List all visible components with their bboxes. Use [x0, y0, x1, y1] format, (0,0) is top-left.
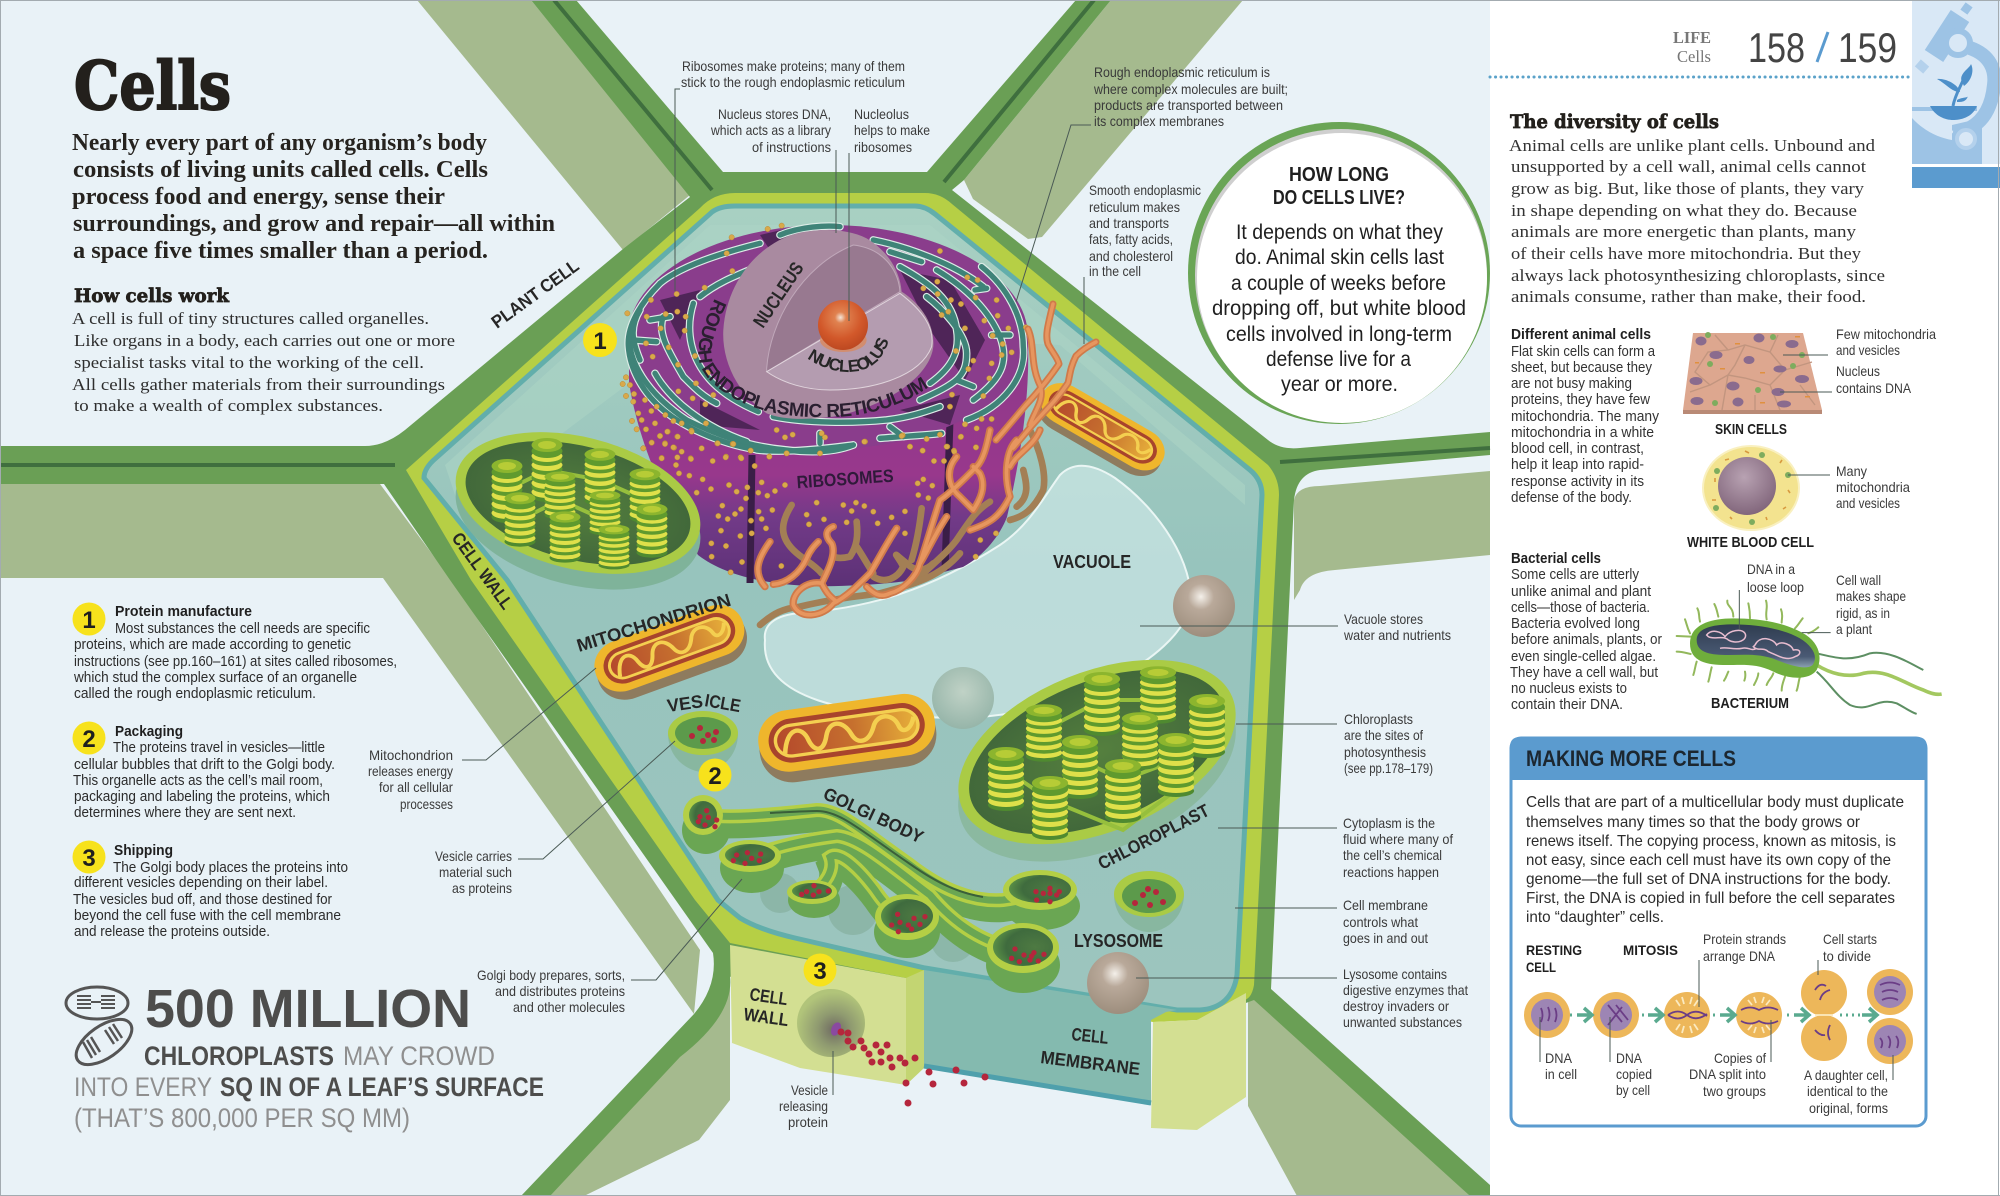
rough endoplasmic reticulum and nucleus [620, 222, 1028, 586]
organelle labels: WALL [742, 1004, 790, 1030]
callout: vesicle releasing protein [779, 1051, 833, 1130]
text: bacterial cells: unlike animal and plant [1511, 583, 1652, 600]
text: different animal cells: Different animal cells [1511, 326, 1651, 343]
mitosis labels: to divide [1823, 948, 1871, 964]
sphere at vacuole edge [1173, 575, 1235, 637]
title: Cells [74, 47, 231, 125]
making more cells text: themselves many times so that the body grows or [1526, 814, 1861, 831]
heading: how cells work: How cells work [74, 285, 230, 307]
labels: skin cells [1715, 326, 1936, 438]
callout: chloroplasts: photosynthesis [1344, 744, 1426, 760]
labels: bacterium: a plant [1836, 621, 1872, 637]
callout: smooth endoplasmic reticulum: reticulum makes [1089, 199, 1180, 215]
callout: nucleolus: helps to make [854, 122, 930, 138]
section: the diversity of cells: The diversity of cells [1510, 111, 1719, 133]
statistic: 500 million chloroplasts [74, 979, 544, 1133]
panel: how long do cells live [1188, 122, 1490, 424]
text: different animal cells: sheet, but because they [1511, 359, 1652, 376]
number marker 1 on cell [583, 323, 617, 357]
text: different animal cells: Flat skin cells can form a [1511, 343, 1656, 360]
callout: nucleus [710, 106, 836, 233]
step 1: protein manufacture: 1 [82, 607, 96, 634]
making more cells text: renews itself. The copying process, known as mitosis, is [1526, 833, 1896, 850]
text: different animal cells: help it leap into rapid- [1511, 456, 1644, 473]
callout: cytoplasm: reactions happen [1343, 864, 1439, 880]
organelle labels: PLANT CELL [488, 256, 583, 332]
lysosome [1087, 952, 1149, 1014]
callout: cell membrane: goes in and out [1343, 930, 1428, 946]
step 3: shipping [72, 840, 348, 940]
mitosis labels [1526, 931, 1888, 1116]
text: bacterial cells: no nucleus exists to [1511, 680, 1627, 697]
text: bacterial cells [1510, 550, 1662, 713]
ribosome dots on cylinder [641, 429, 999, 575]
label: rough endoplasmic reticulum: ROUGH ENDOPLASMIC RETICULUM [698, 300, 928, 418]
mitosis labels: arrange DNA [1703, 948, 1776, 964]
callout: golgi body [477, 879, 742, 1015]
callout: vacuole: water and nutrients [1343, 627, 1451, 643]
panel: how long do cells live: do. Animal skin cells last [1235, 246, 1444, 269]
vesicle releasing protein [797, 989, 865, 1057]
text: different animal cells: are not busy making [1511, 375, 1632, 392]
organelle labels: CELL [1071, 1024, 1109, 1048]
text: bacterial cells: before animals, plants, or [1511, 631, 1662, 648]
callout: smooth endoplasmic reticulum: Smooth endoplasmic [1089, 182, 1201, 198]
smooth endoplasmic reticulum [758, 304, 1096, 625]
panel: how long do cells live: It depends on what they [1236, 221, 1443, 244]
text: different animal cells: proteins, they have few [1511, 391, 1650, 408]
step 2: packaging [72, 722, 335, 821]
making more cells text: into “daughter” cells. [1526, 909, 1664, 926]
organelle labels [448, 256, 1213, 1079]
text: bacterial cells: cells—those of bacteria. [1511, 599, 1650, 616]
callout: ribosomes: stick to the rough endoplasmic reticulum [681, 74, 905, 90]
number marker 1 on cell: 1 [593, 328, 607, 355]
label: ribosomes: RIBOSOMES [796, 466, 894, 492]
right page background [1490, 0, 2000, 1196]
chloroplast lower right [931, 623, 1263, 899]
vesicle lower right [1114, 871, 1184, 932]
callout: ribosomes [675, 58, 905, 291]
step 1: protein manufacture: proteins, which are made according to genetic [74, 637, 351, 653]
labels: skin cells: SKIN CELLS [1715, 421, 1787, 438]
intro paragraph: a space five times smaller than a period. [73, 238, 488, 264]
callout: cytoplasm: the cell’s chemical [1343, 847, 1442, 863]
labels: bacterium: rigid, as in [1836, 605, 1890, 621]
statistic: 500 million chloroplasts: SQ IN OF A LEAF’S SURFACE [220, 1072, 544, 1102]
statistic: 500 million chloroplasts: MAY CROWD [343, 1041, 495, 1071]
callout: nucleolus [849, 106, 930, 321]
vacuole [765, 466, 1190, 718]
callout: nucleus: which acts as a library [710, 122, 831, 138]
callout: lysosome: unwanted substances [1343, 1014, 1462, 1030]
number marker 2 on cell [698, 758, 732, 792]
icon: microscope with plant [1912, 0, 2000, 188]
how cells work text [72, 309, 455, 415]
text: bacterial cells: Bacterial cells [1511, 550, 1601, 567]
section: the diversity of cells [1509, 111, 1885, 306]
callout: golgi body: Golgi body prepares, sorts, [477, 967, 625, 983]
mitosis labels: in cell [1545, 1066, 1577, 1082]
labels: bacterium: makes shape [1836, 588, 1906, 604]
callout: smooth endoplasmic reticulum: fats, fatty acids, [1089, 231, 1173, 247]
callout: golgi body: and distributes proteins [495, 983, 625, 999]
callout: vesicle releasing protein: releasing [779, 1098, 828, 1114]
how cells work text: Like organs in a body, each carries out one or more [74, 331, 455, 350]
mitosis labels: two groups [1703, 1083, 1766, 1099]
step 1: protein manufacture: which stud the complex surface of an organelle [73, 670, 357, 686]
organelle labels: LYSOSOME [1074, 931, 1163, 951]
panel: how long do cells live: HOW LONG [1289, 164, 1389, 186]
sphere behind vacuole [932, 667, 994, 729]
text: bacterial cells: They have a cell wall, but [1510, 664, 1659, 681]
callout: vesicle: Vesicle carries [435, 848, 512, 864]
callout: smooth endoplasmic reticulum: in the cell [1089, 263, 1141, 279]
step 2: packaging: This organelle acts as the cell’s mail room, [73, 773, 323, 789]
labels: white blood cell [1687, 463, 1910, 551]
statistic: 500 million chloroplasts: (THAT’S 800,000 PER SQ MM) [74, 1103, 410, 1133]
mitosis labels: A daughter cell, [1804, 1067, 1888, 1083]
nucleus [723, 230, 933, 419]
mitosis labels: DNA [1545, 1050, 1573, 1066]
intro paragraph [72, 130, 555, 264]
callout: rough endoplasmic reticulum: its complex membranes [1094, 113, 1224, 129]
how cells work text: A cell is full of tiny structures called organelles. [72, 309, 429, 328]
text: bacterial cells: contain their DNA. [1511, 696, 1623, 713]
statistic: 500 million chloroplasts: CHLOROPLASTS [144, 1041, 334, 1071]
callout: cell membrane: Cell membrane [1343, 897, 1428, 913]
number marker 3 on cell: 3 [813, 958, 827, 985]
label: nucleus: NUCLEUS [750, 259, 809, 332]
step 2: packaging: The proteins travel in vesicles—little [113, 740, 325, 756]
callout: cell membrane [1235, 897, 1428, 946]
callout: rough endoplasmic reticulum [1016, 64, 1288, 302]
organelle labels: CELL [748, 984, 789, 1009]
step 3: shipping: The Golgi body places the proteins into [113, 860, 348, 876]
intro paragraph: Nearly every part of any organism’s body [72, 130, 487, 156]
panel: how long do cells live: year or more. [1281, 373, 1398, 396]
callout: golgi body: and other molecules [513, 999, 625, 1015]
step 3: shipping: The vesicles bud off, and those destined for [73, 892, 332, 908]
callout: chloroplasts [1236, 711, 1433, 776]
mitosis labels: Copies of [1714, 1050, 1766, 1066]
cell wall cutaway [730, 945, 1246, 1130]
step 2: packaging: packaging and labeling the proteins, which [74, 789, 330, 805]
mitosis labels: RESTING [1526, 942, 1582, 958]
organelle labels: MEMBRANE [1040, 1047, 1141, 1079]
mitosis labels: copied [1616, 1066, 1652, 1082]
neighbouring plant cells: wall network [0, 0, 1490, 1196]
callout: rough endoplasmic reticulum: Rough endoplasmic reticulum is [1094, 64, 1270, 80]
labels: bacterium [1711, 561, 1906, 712]
mitosis diagram [1524, 960, 1913, 1080]
label: nucleolus: NUCLEOLUS [808, 338, 888, 372]
how cells work text: specialist tasks vital to the working of the cell. [74, 353, 424, 372]
text: bacterial cells: Some cells are utterly [1511, 566, 1639, 583]
callout: mitochondrion: for all cellular [379, 779, 453, 795]
labels: skin cells: contains DNA [1836, 380, 1912, 396]
making more cells text: not easy, since each cell must have its own copy of the [1526, 852, 1891, 869]
step 1: protein manufacture: called the rough endoplasmic reticulum. [74, 686, 316, 702]
callout: smooth endoplasmic reticulum [1084, 182, 1201, 344]
dotted header rule [1490, 76, 1910, 78]
callout: mitochondrion: Mitochondrion [369, 747, 453, 763]
step 1: protein manufacture [72, 602, 397, 702]
callout: cytoplasm: Cytoplasm is the [1343, 815, 1435, 831]
section: the diversity of cells: grow as big. But, like those of plants, they vary [1511, 179, 1865, 198]
step 2: packaging: determines where they are sent next. [74, 805, 296, 821]
labels: bacterium: loose loop [1747, 579, 1804, 595]
intro paragraph: surroundings, and grow and repair—all within [73, 211, 555, 237]
page header: section and folio [1673, 24, 1897, 71]
illustration: white blood cell [1703, 446, 1830, 530]
panel: how long do cells live: cells involved in long-term [1226, 323, 1452, 346]
plant cell: wall, membrane and cytoplasm [406, 193, 1279, 1022]
step 1: protein manufacture: instructions (see pp.160–161) at sites called ribosomes, [74, 654, 397, 670]
organelle labels: CHLOROPLAST [1095, 800, 1213, 874]
chloroplast upper left [440, 409, 716, 613]
section: the diversity of cells: of their cells have more mitochondria. But they [1511, 244, 1862, 263]
panel: how long do cells live: DO CELLS LIVE? [1273, 187, 1405, 209]
callout: smooth endoplasmic reticulum: and transports [1089, 215, 1169, 231]
page header: section and folio: 159 [1838, 24, 1897, 71]
callout: mitochondrion: processes [400, 796, 453, 812]
callout: nucleolus: Nucleolus [854, 106, 909, 122]
intro paragraph: consists of living units called cells. Cells [73, 157, 488, 183]
text: different animal cells: response activity in its [1511, 473, 1644, 490]
callout: mitochondrion: releases energy [368, 763, 453, 779]
text: different animal cells: mitochondria in a white [1511, 424, 1654, 441]
callout: vesicle: material such [439, 864, 512, 880]
making more cells text: Cells that are part of a multicellular body must duplicate [1526, 794, 1904, 811]
organelle labels: CELL WALL [448, 529, 517, 613]
step 2: packaging: cellular bubbles that drift to the Golgi body. [74, 757, 335, 773]
mitosis labels: Protein strands [1703, 931, 1786, 947]
labels: skin cells: and vesicles [1836, 342, 1900, 358]
organelle labels: VES [666, 691, 704, 716]
step 2: packaging: 2 [82, 726, 96, 753]
callout: cytoplasm [1218, 815, 1453, 880]
page header: section and folio: LIFE [1673, 28, 1711, 47]
step 3: shipping: different vesicles depending on their label. [74, 875, 328, 891]
section: the diversity of cells: in shape depending on what they do. Because [1511, 201, 1857, 220]
page header: section and folio: Cells [1677, 47, 1711, 66]
illustration: bacterium [1677, 590, 1942, 714]
callout: chloroplasts: (see pp.178–179) [1344, 760, 1433, 776]
callout: cell membrane: controls what [1343, 914, 1418, 930]
labels: white blood cell: WHITE BLOOD CELL [1687, 534, 1814, 551]
organelle labels: ICLE [703, 690, 742, 716]
ribosome dots on ring [620, 223, 1029, 461]
labels: bacterium: BACTERIUM [1711, 695, 1789, 712]
panel: how long do cells live: defense live for a [1266, 348, 1411, 371]
mitosis labels: identical to the [1807, 1083, 1888, 1099]
labels: skin cells: Few mitochondria [1836, 326, 1936, 342]
callout: rough endoplasmic reticulum: products are transported between [1094, 97, 1283, 113]
step 3: shipping: beyond the cell fuse with the cell membrane [74, 908, 341, 924]
callout: mitochondrion [368, 668, 596, 812]
callout: lysosome [1136, 966, 1468, 1030]
mitochondrion centre [754, 690, 941, 787]
text: bacterial cells: Bacteria evolved long [1511, 615, 1640, 632]
callout: lysosome: destroy invaders or [1343, 998, 1449, 1014]
step 3: shipping: 3 [82, 845, 96, 872]
callout: cytoplasm: fluid where many of [1343, 831, 1453, 847]
labels: white blood cell: mitochondria [1836, 479, 1910, 495]
text: different animal cells: blood cell, in contrast, [1511, 440, 1644, 457]
callout: chloroplasts: are the sites of [1344, 727, 1423, 743]
number marker 3 on cell [804, 954, 836, 986]
callout: nucleus: of instructions [752, 139, 831, 155]
organelle labels: GOLGI BODY [820, 783, 927, 847]
icon: two chloroplasts [66, 987, 139, 1073]
step 3: shipping: Shipping [114, 843, 173, 859]
text: different animal cells: mitochondria. The many [1511, 408, 1659, 425]
step 1: protein manufacture: Protein manufacture [115, 604, 252, 620]
section: the diversity of cells: animals consume, rather than make, their food. [1511, 287, 1866, 306]
section: the diversity of cells: unsupported by a cell wall, animal cells cannot [1511, 157, 1866, 176]
callout: lysosome: digestive enzymes that [1343, 982, 1468, 998]
making more cells text [1526, 794, 1904, 926]
callout: rough endoplasmic reticulum: where complex molecules are built; [1093, 81, 1288, 97]
text: different animal cells [1511, 326, 1659, 506]
left page background [0, 0, 1490, 1196]
nucleolus [818, 300, 868, 350]
mitochondrion left [587, 597, 755, 708]
callout: vesicle [435, 741, 675, 896]
labels: white blood cell: Many [1836, 463, 1867, 479]
panel: how long do cells live: dropping off, but white blood [1212, 297, 1466, 320]
callout: vesicle releasing protein: Vesicle [791, 1082, 828, 1098]
labels: skin cells: Nucleus [1836, 363, 1880, 379]
intro paragraph: process food and energy, sense their [72, 184, 445, 210]
number marker 2 on cell: 2 [708, 763, 722, 790]
mitosis labels: DNA split into [1689, 1066, 1766, 1082]
golgi body [682, 795, 1080, 993]
labels: bacterium: DNA in a [1747, 561, 1795, 577]
callout: vacuole: Vacuole stores [1344, 611, 1423, 627]
mitosis labels: original, forms [1809, 1100, 1888, 1116]
panel: how long do cells live: a couple of weeks before [1231, 272, 1446, 295]
text: different animal cells: defense of the body. [1511, 489, 1632, 506]
labels: white blood cell: and vesicles [1836, 495, 1900, 511]
organelle labels: VACUOLE [1053, 552, 1131, 572]
heading: making more cells: MAKING MORE CELLS [1526, 746, 1736, 771]
how cells work text: to make a wealth of complex substances. [74, 396, 383, 415]
callout: nucleus: Nucleus stores DNA, [718, 106, 831, 122]
section: the diversity of cells: Animal cells are unlike plant cells. Unbound and [1509, 136, 1876, 155]
callout: nucleolus: ribosomes [854, 139, 912, 155]
mitosis labels: Cell starts [1823, 931, 1877, 947]
statistic: 500 million chloroplasts: INTO EVERY [74, 1072, 212, 1102]
callout: vacuole [1140, 611, 1451, 643]
mitochondrion upper right [1030, 375, 1172, 485]
step 2: packaging: Packaging [115, 724, 183, 740]
panel: making more cells [1510, 737, 1927, 1126]
callout: vesicle: as proteins [452, 880, 512, 896]
step 1: protein manufacture: Most substances the cell needs are specific [115, 621, 370, 637]
statistic: 500 million chloroplasts: 500 MILLION [145, 979, 471, 1039]
mitosis labels: by cell [1616, 1082, 1650, 1098]
mitosis labels: CELL [1526, 959, 1556, 975]
text: bacterial cells: even single-celled algae. [1511, 648, 1656, 665]
callout: vesicle releasing protein: protein [788, 1114, 828, 1130]
released protein dots [838, 1028, 988, 1106]
making more cells text: genome—the full set of DNA instructions for the body. [1526, 871, 1891, 888]
mitosis labels: MITOSIS [1623, 942, 1678, 958]
organelle labels: MITOCHONDRION [574, 590, 733, 656]
callout: smooth endoplasmic reticulum: and cholesterol [1089, 248, 1173, 264]
labels: bacterium: Cell wall [1836, 572, 1881, 588]
callout: ribosomes: Ribosomes make proteins; many of them [682, 58, 905, 74]
step 3: shipping: and release the proteins outside. [74, 924, 270, 940]
how cells work text: All cells gather materials from their surroundings [72, 375, 445, 394]
callout: lysosome: Lysosome contains [1343, 966, 1447, 982]
section: the diversity of cells: animals are more energetic than plants, many [1511, 222, 1857, 241]
making more cells text: First, the DNA is copied in full before the cell separates [1526, 890, 1895, 907]
vesicle near golgi [668, 711, 738, 772]
callout: chloroplasts: Chloroplasts [1344, 711, 1413, 727]
illustration: skin cells [1683, 332, 1832, 414]
mitosis labels: DNA [1616, 1050, 1643, 1066]
section: the diversity of cells: always lack photosynthesizing chloroplasts, since [1511, 266, 1885, 285]
page header: section and folio: 158 [1748, 24, 1805, 71]
